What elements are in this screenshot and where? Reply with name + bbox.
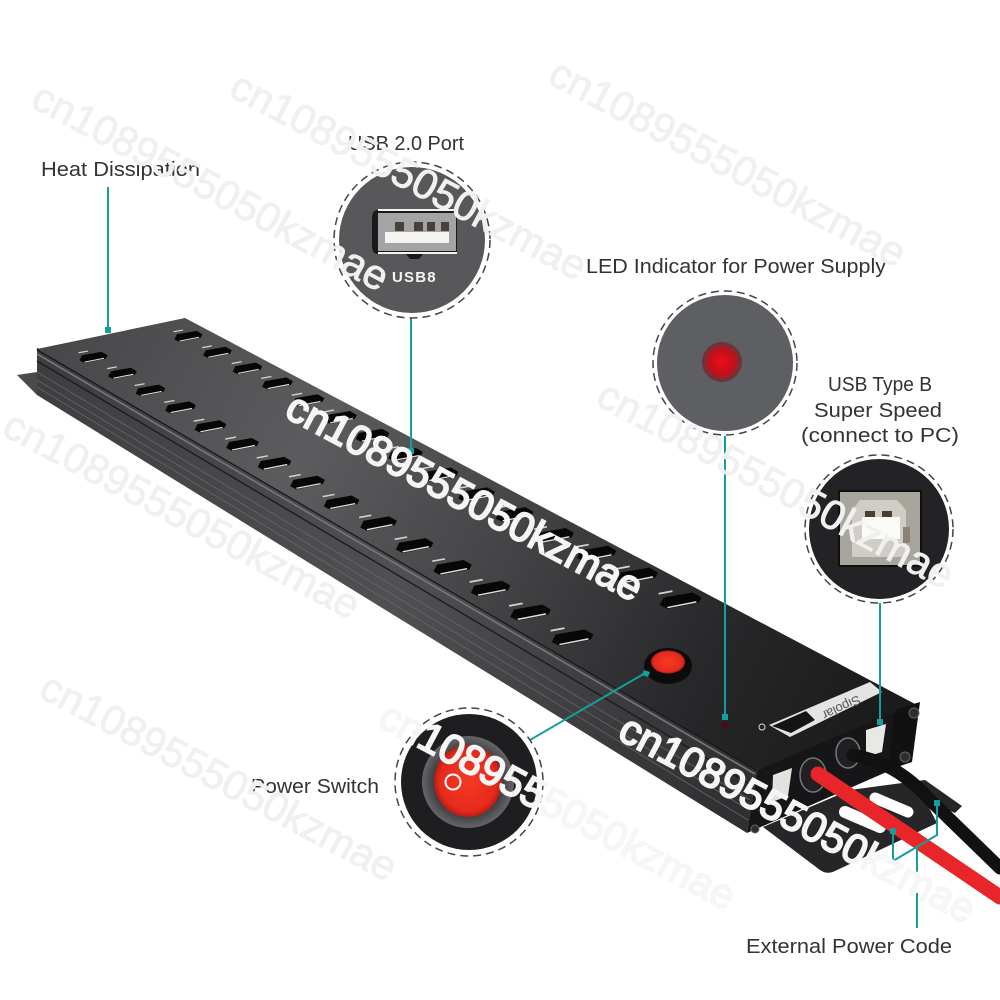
circle: USB port close-up <box>330 160 500 320</box>
watermarks: cn1089555050kzmae <box>0 400 368 628</box>
black power cable <box>853 755 1000 868</box>
hub top face <box>37 318 917 770</box>
watermarks: cn1089555050kzmae <box>542 48 914 276</box>
callout: USB type B: USB Type B <box>828 374 932 396</box>
callout: heat dissipation: Heat Dissipation <box>41 159 200 181</box>
screws <box>751 708 919 833</box>
callout: USB 2.0 port: USB 2.0 Port <box>348 133 464 155</box>
callout: LED indicator: LED Indicator for Power Supply <box>586 256 886 278</box>
callout: USB type B: (connect to PC) <box>801 425 959 447</box>
callout: heat dissipation <box>41 159 200 333</box>
USB ports row A <box>79 351 593 646</box>
power rocker switch on hub <box>644 648 692 684</box>
callout: external power cord: External Power Code <box>746 936 952 958</box>
callout: USB type B: Super Speed <box>814 400 942 422</box>
watermarks: cn1089555050kzmae <box>33 662 405 890</box>
hub front face <box>747 702 920 833</box>
callout: power switch <box>251 670 650 858</box>
callout: LED indicator <box>586 256 886 720</box>
cable grommets <box>800 738 860 792</box>
red power cable <box>818 774 1000 897</box>
watermarks: cn1089555050kzmae <box>223 61 595 289</box>
watermarks: cn1089555050kzmae <box>590 370 962 598</box>
USB ports row B <box>174 330 701 609</box>
hub back flange <box>17 372 37 395</box>
circle: USB port close-up: USB8 <box>392 269 437 286</box>
callout: USB type B <box>801 374 959 725</box>
circle: type B close-up <box>805 455 955 605</box>
watermarks: cn1089555050kzmae <box>279 382 651 610</box>
brand label <box>759 682 882 737</box>
watermarks: cn1089555050kzmae <box>612 704 984 932</box>
brand label: Sipolar <box>819 692 863 723</box>
USB connector <box>372 210 457 254</box>
callout: USB 2.0 port <box>330 133 500 454</box>
watermarks: cn1089555050kzmae <box>25 72 397 300</box>
hub side face <box>37 349 757 833</box>
port: side USB on hub <box>772 768 792 802</box>
circle: switch close-up <box>392 708 543 858</box>
callout: power switch: Power Switch <box>251 776 379 798</box>
port: USB type B on hub <box>866 724 886 757</box>
LED hole <box>722 722 728 728</box>
watermarks: cn1089555050kzmae <box>372 691 744 919</box>
callout: external power cord <box>746 800 952 958</box>
front mounting flange <box>763 780 962 873</box>
circle: LED close-up <box>650 290 800 440</box>
